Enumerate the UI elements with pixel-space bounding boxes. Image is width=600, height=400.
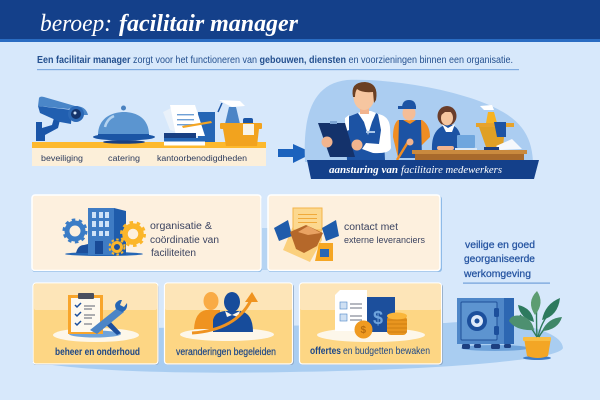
banner: facilitaire medewerkers: [401, 164, 502, 176]
intro sentence: Een facilitair manager zorgt voor het functioneren van gebouwen, diensten en voorzieningen binnen een organisatie.: [37, 55, 513, 66]
card label: veranderingen begeleiden: [176, 347, 276, 358]
icon: handshake and documents: [274, 208, 339, 262]
office worker figure: [432, 106, 462, 150]
label: beveiliging: beveiliging: [41, 153, 83, 163]
shelf: [32, 142, 266, 166]
title: [40, 11, 299, 37]
icon: laptop: [455, 135, 477, 150]
card: beheer en onderhoud: [33, 283, 159, 365]
icon: building with gears: [64, 208, 144, 256]
card text: externe leveranciers: [344, 235, 425, 245]
card text: contact met: [344, 222, 398, 233]
card: contact met externe leveranciers: [268, 195, 442, 272]
panel: aansturing van facilitaire medewerkers: [305, 80, 539, 179]
icon: potted plant: [509, 291, 562, 360]
label: catering: catering: [108, 153, 140, 163]
header: [0, 0, 600, 42]
banner: [307, 160, 539, 179]
icon: quote, banknote and coins: $: [360, 325, 366, 336]
callout: veilige en goed georganiseerde werkomgeving: veilige en goed: [465, 239, 535, 251]
icon: checklist and wrench: [53, 293, 139, 342]
manager figure: [318, 82, 391, 160]
icon: safe: [457, 298, 529, 351]
desk: [412, 150, 527, 160]
icon: people with rising arrow: [180, 292, 274, 341]
card label: [310, 346, 430, 357]
card label: offertes: [310, 346, 341, 357]
icon: quote, banknote and coins: [317, 290, 425, 342]
card text: [150, 221, 219, 259]
callout: veilige en goed georganiseerde werkomgeving: werkomgeving: [463, 268, 531, 280]
card text: faciliteiten: [151, 248, 196, 259]
card text: organisatie &: [150, 221, 212, 232]
card label: en budgetten bewaken: [343, 346, 430, 357]
label: kantoorbenodigdheden: kantoorbenodigdheden: [157, 153, 247, 163]
banner: aansturing van: [329, 164, 398, 176]
callout: veilige en goed georganiseerde werkomgeving: georganiseerde: [464, 253, 535, 265]
icon: quote, banknote and coins: $: [373, 308, 383, 328]
title: facilitair manager: [119, 11, 299, 37]
card text: coördinatie van: [150, 235, 219, 246]
arrow: [278, 144, 313, 163]
icon: bucket and supplies on desk: [476, 105, 522, 150]
card label: beheer en onderhoud: [55, 347, 140, 358]
callout: veilige en goed georganiseerde werkomgeving: [463, 239, 550, 284]
card: offertes en budgetten bewaken: [300, 283, 443, 365]
icon: office supplies: [163, 105, 215, 146]
card text: [344, 222, 425, 245]
card: organisatie en coördinatie: [32, 195, 262, 272]
title: beroep:: [40, 11, 112, 37]
panel: shelf with supplies: [32, 97, 266, 166]
icon: catering cloche: [93, 106, 155, 144]
technician figure: [393, 100, 430, 160]
icon: cleaning bucket and spray: [218, 100, 262, 146]
card: veranderingen begeleiden: [164, 283, 294, 365]
icon: security camera: [36, 97, 88, 141]
